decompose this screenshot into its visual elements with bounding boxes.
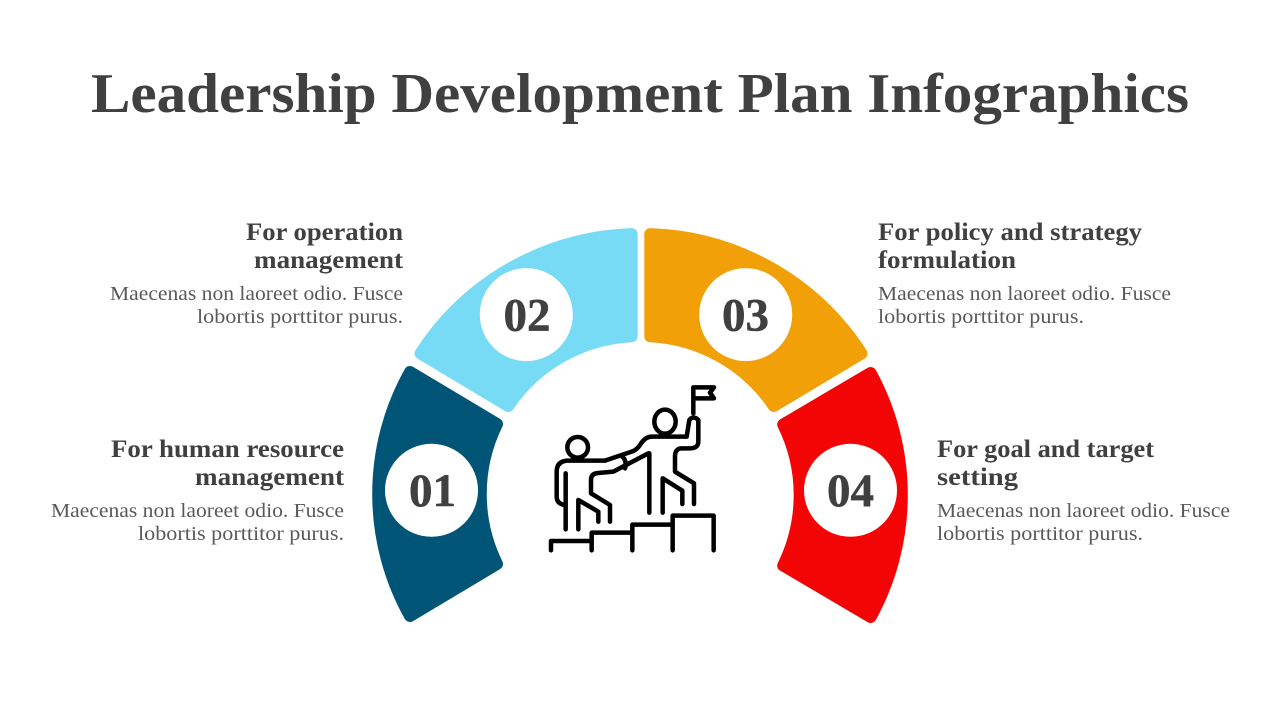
text block: operation management: management (254, 245, 404, 274)
panel: segment 04 goal (783, 373, 902, 617)
icon: two people climbing steps with flag (551, 387, 714, 550)
segment arc 03 (650, 234, 862, 406)
number badge 04 (804, 444, 897, 537)
panel: segment 01 human resource (378, 372, 497, 616)
text block: goal and target setting: For goal and target (937, 434, 1155, 463)
panel: segment 03 policy (650, 234, 862, 406)
text block: goal and target setting (937, 434, 1230, 545)
text block: human resource management: lobortis porttitor purus. (138, 524, 344, 545)
text block: operation management: Maecenas non laoreet odio. Fusce (110, 284, 403, 305)
text block: goal and target setting: setting (937, 462, 1018, 491)
text block: human resource management (51, 434, 345, 545)
number badge 04: 04 (827, 465, 874, 517)
number badge 01 (385, 444, 478, 537)
text block: operation management (110, 217, 404, 328)
text block: human resource management: For human resource (111, 434, 344, 463)
text block: policy and strategy formulation: lobortis porttitor purus. (878, 307, 1084, 328)
text block: policy and strategy formulation (878, 217, 1171, 328)
number badge 02: 02 (504, 290, 550, 342)
text block: human resource management: Maecenas non laoreet odio. Fusce (51, 501, 344, 522)
text block: policy and strategy formulation: formulation (878, 245, 1016, 274)
title: Leadership Development Plan Infographics (91, 63, 1189, 125)
number badge 03 (699, 268, 792, 361)
number badge 03: 03 (722, 290, 769, 342)
number badge 02 (480, 268, 573, 361)
text block: operation management: For operation (246, 217, 403, 246)
panel: segment 02 operation (420, 234, 632, 406)
segment arc 02 (420, 234, 632, 406)
text block: operation management: lobortis porttitor purus. (197, 307, 403, 328)
segment arc 04 (783, 373, 902, 617)
text block: goal and target setting: Maecenas non laoreet odio. Fusce (937, 501, 1230, 522)
segment arc 01 (378, 372, 497, 616)
text block: policy and strategy formulation: Maecenas non laoreet odio. Fusce (878, 284, 1171, 305)
text block: policy and strategy formulation: For policy and strategy (878, 217, 1142, 246)
text block: goal and target setting: lobortis porttitor purus. (937, 524, 1143, 545)
text block: human resource management: management (195, 462, 345, 491)
number badge 01: 01 (409, 465, 456, 517)
